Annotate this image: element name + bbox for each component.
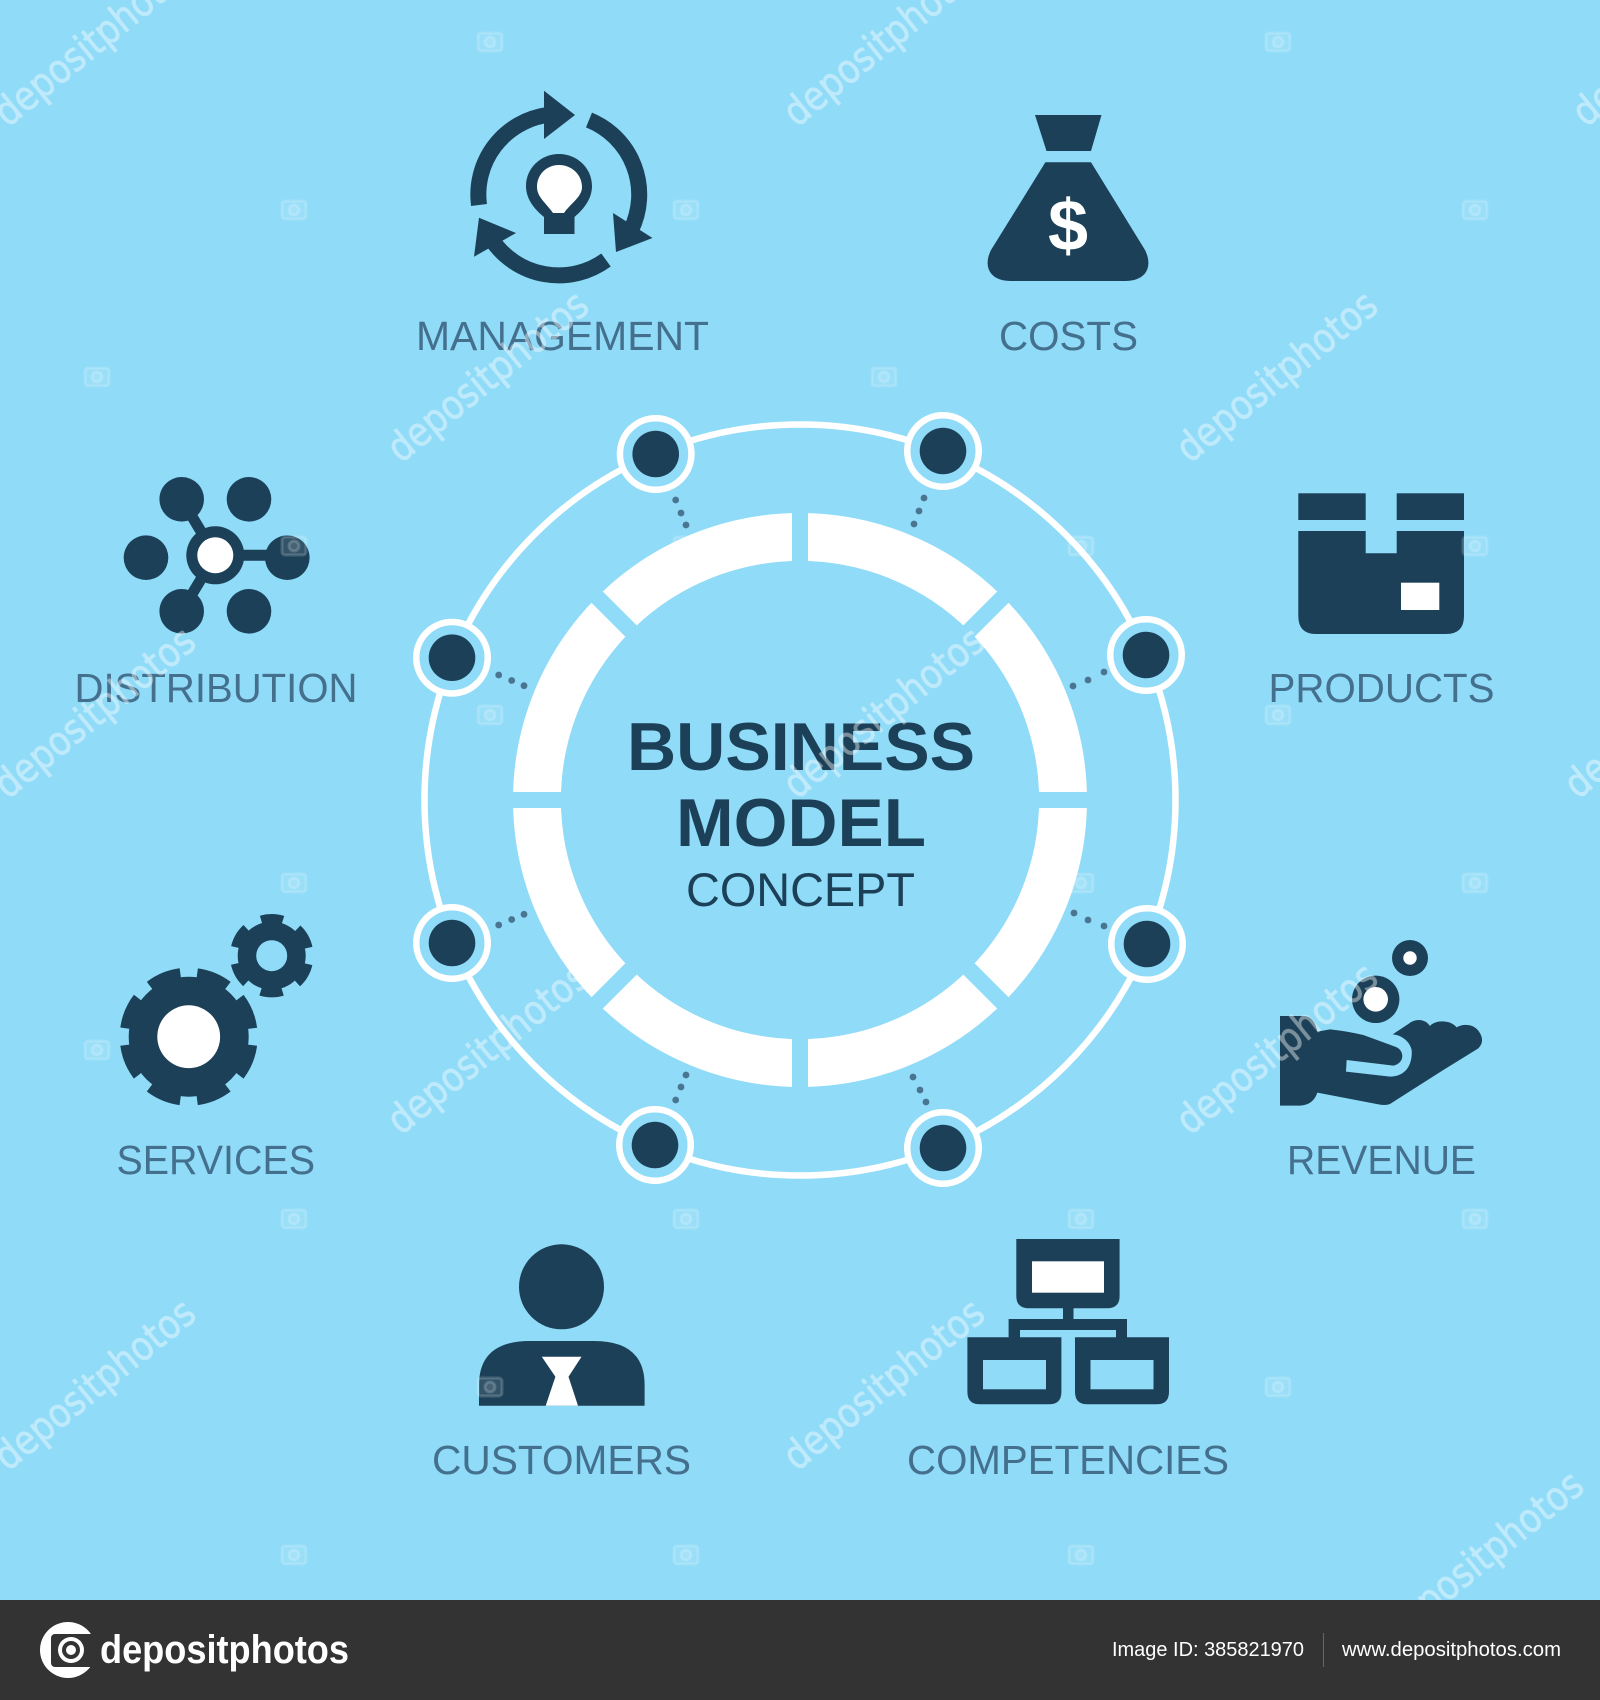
label: services: SERVICES <box>116 1137 315 1183</box>
label: revenue: REVENUE <box>1287 1137 1476 1183</box>
central title: MODEL <box>676 785 926 861</box>
footer image id: Image ID: 385821970 <box>1112 1639 1304 1661</box>
footer logo wordmark: depositphotos <box>100 1628 349 1672</box>
label: costs: COSTS <box>999 313 1138 359</box>
central donut: eight white segments <box>500 500 1100 1100</box>
icon: money bag <box>988 115 1148 281</box>
watermark camera marks <box>85 33 1487 1564</box>
watermark text: depositphotos <box>1167 282 1387 472</box>
label: management: MANAGEMENT <box>416 313 709 359</box>
icon: competencies org chart <box>967 1239 1169 1404</box>
icon: customer with tie <box>479 1244 645 1406</box>
watermark text: depositphotos <box>378 282 598 472</box>
watermark text: depositphotos <box>774 1290 994 1480</box>
icon: distribution network <box>124 477 310 634</box>
label: competencies: COMPETENCIES <box>907 1437 1229 1483</box>
icon: product box <box>1298 493 1464 634</box>
icon: hand with coins <box>1280 940 1482 1106</box>
icon: gears <box>125 919 309 1100</box>
watermark text: depositphotos <box>774 618 994 808</box>
watermark text: depositphotos <box>378 954 598 1144</box>
footer site url: www.depositphotos.com <box>1341 1639 1561 1661</box>
icon: money bag: $ <box>1048 186 1088 266</box>
icon: footer logo <box>40 1622 98 1678</box>
central title: CONCEPT <box>686 863 915 916</box>
central title: BUSINESS <box>627 709 975 785</box>
label: customers: CUSTOMERS <box>432 1437 691 1483</box>
label: distribution: DISTRIBUTION <box>74 665 358 711</box>
footer bar <box>0 1600 1600 1700</box>
ring nodes with dotted connectors <box>416 415 1183 1184</box>
outer ring <box>424 424 1176 1176</box>
watermark text: depositphotos <box>1167 954 1387 1144</box>
central title <box>627 709 975 916</box>
label: products: PRODUCTS <box>1268 665 1494 711</box>
icon: management cycle with bulb <box>474 91 652 275</box>
